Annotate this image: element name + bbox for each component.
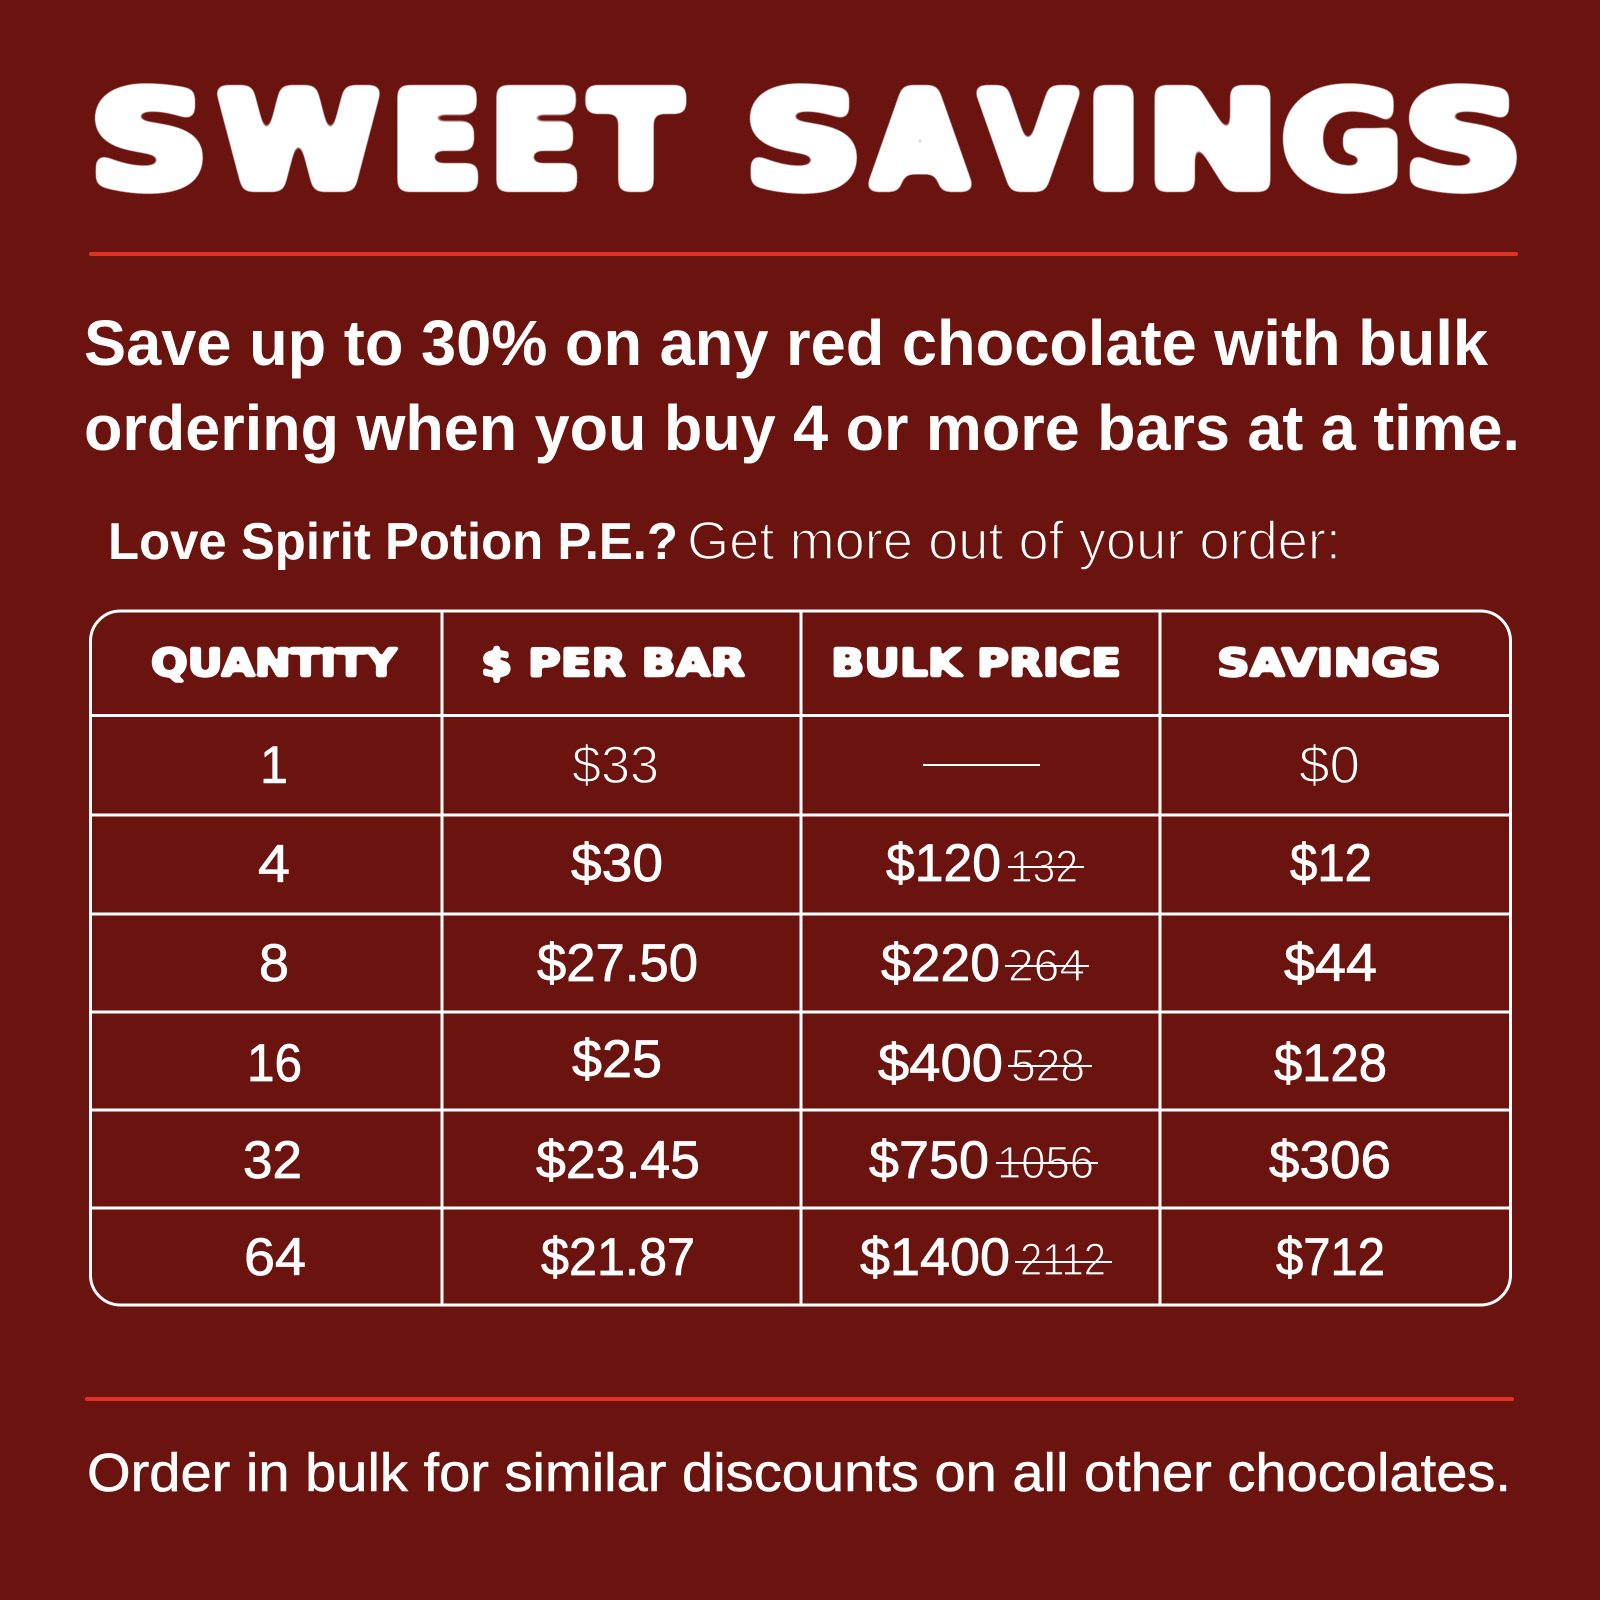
table grid xyxy=(90,611,1511,1305)
row: quantity 4: $120 xyxy=(886,834,1001,893)
table intro: Love Spirit Potion P.E.? xyxy=(108,513,678,571)
title: S xyxy=(89,65,209,219)
row: quantity 16: $400 xyxy=(878,1034,1003,1093)
row: quantity 1: $0 xyxy=(1299,736,1360,795)
title xyxy=(89,65,1523,219)
title: A xyxy=(871,65,969,219)
table header: $ PER BAR xyxy=(481,641,745,685)
row: quantity 8: $44 xyxy=(1284,934,1377,993)
title: N xyxy=(1146,65,1279,219)
row: quantity 1: 1 xyxy=(260,736,288,795)
title: E xyxy=(489,65,582,219)
title: E xyxy=(390,65,483,219)
row: quantity 8 xyxy=(259,934,1377,993)
row: quantity 16 xyxy=(247,1030,1387,1093)
title: S xyxy=(744,65,863,219)
row: quantity 32: $750 xyxy=(869,1131,989,1190)
row: quantity 16: 528 xyxy=(1011,1040,1085,1091)
row: quantity 16: $25 xyxy=(572,1030,662,1089)
offer text xyxy=(84,307,1520,464)
row: quantity 64: 2112 xyxy=(1020,1234,1106,1285)
row: quantity 4 xyxy=(258,834,1372,894)
row: quantity 4: $12 xyxy=(1290,834,1372,893)
title: G xyxy=(1281,65,1403,219)
table intro: Get more out of your order: xyxy=(687,511,1341,571)
table header: BULK PRICE xyxy=(831,641,1121,685)
pricing table xyxy=(90,611,1511,1305)
table header xyxy=(151,641,1441,685)
table header: QUANTITY xyxy=(151,641,398,685)
row: quantity 64: $712 xyxy=(1276,1228,1385,1287)
title: T xyxy=(590,65,682,219)
row: quantity 32: 32 xyxy=(243,1131,302,1190)
row: quantity 32: $23.45 xyxy=(536,1131,700,1190)
row: quantity 8: $220 xyxy=(881,934,1000,993)
row: quantity 8: 264 xyxy=(1008,940,1085,991)
row: quantity 64: $21.87 xyxy=(541,1228,695,1287)
footer note: Order in bulk for similar discounts on all other chocolates. xyxy=(87,1443,1511,1503)
title: V xyxy=(979,65,1077,219)
row: quantity 64 xyxy=(244,1228,1385,1287)
row: quantity 1: $33 xyxy=(572,736,659,795)
row: quantity 4: $30 xyxy=(571,834,663,893)
row: quantity 8: $27.50 xyxy=(537,934,698,993)
row: quantity 8: 8 xyxy=(259,934,289,993)
row: quantity 1 xyxy=(260,736,1360,795)
row: quantity 4: 4 xyxy=(258,835,290,894)
title: S xyxy=(1403,65,1523,219)
offer text: Save up to 30% on any red chocolate with bulk xyxy=(84,307,1488,379)
row: quantity 32: 1056 xyxy=(997,1137,1094,1188)
row: quantity 64: 64 xyxy=(244,1228,306,1287)
title: W xyxy=(217,65,380,219)
row: quantity 16: $128 xyxy=(1274,1034,1387,1093)
row: quantity 16: 16 xyxy=(247,1034,302,1093)
row: quantity 4: 132 xyxy=(1010,841,1078,892)
row: quantity 32: $306 xyxy=(1269,1131,1391,1190)
title: I xyxy=(1085,65,1142,219)
offer text: ordering when you buy 4 or more bars at a time. xyxy=(84,392,1520,464)
table header: SAVINGS xyxy=(1217,641,1441,685)
row: quantity 32 xyxy=(243,1131,1391,1190)
table intro xyxy=(108,511,1341,571)
row: quantity 64: $1400 xyxy=(860,1228,1010,1287)
